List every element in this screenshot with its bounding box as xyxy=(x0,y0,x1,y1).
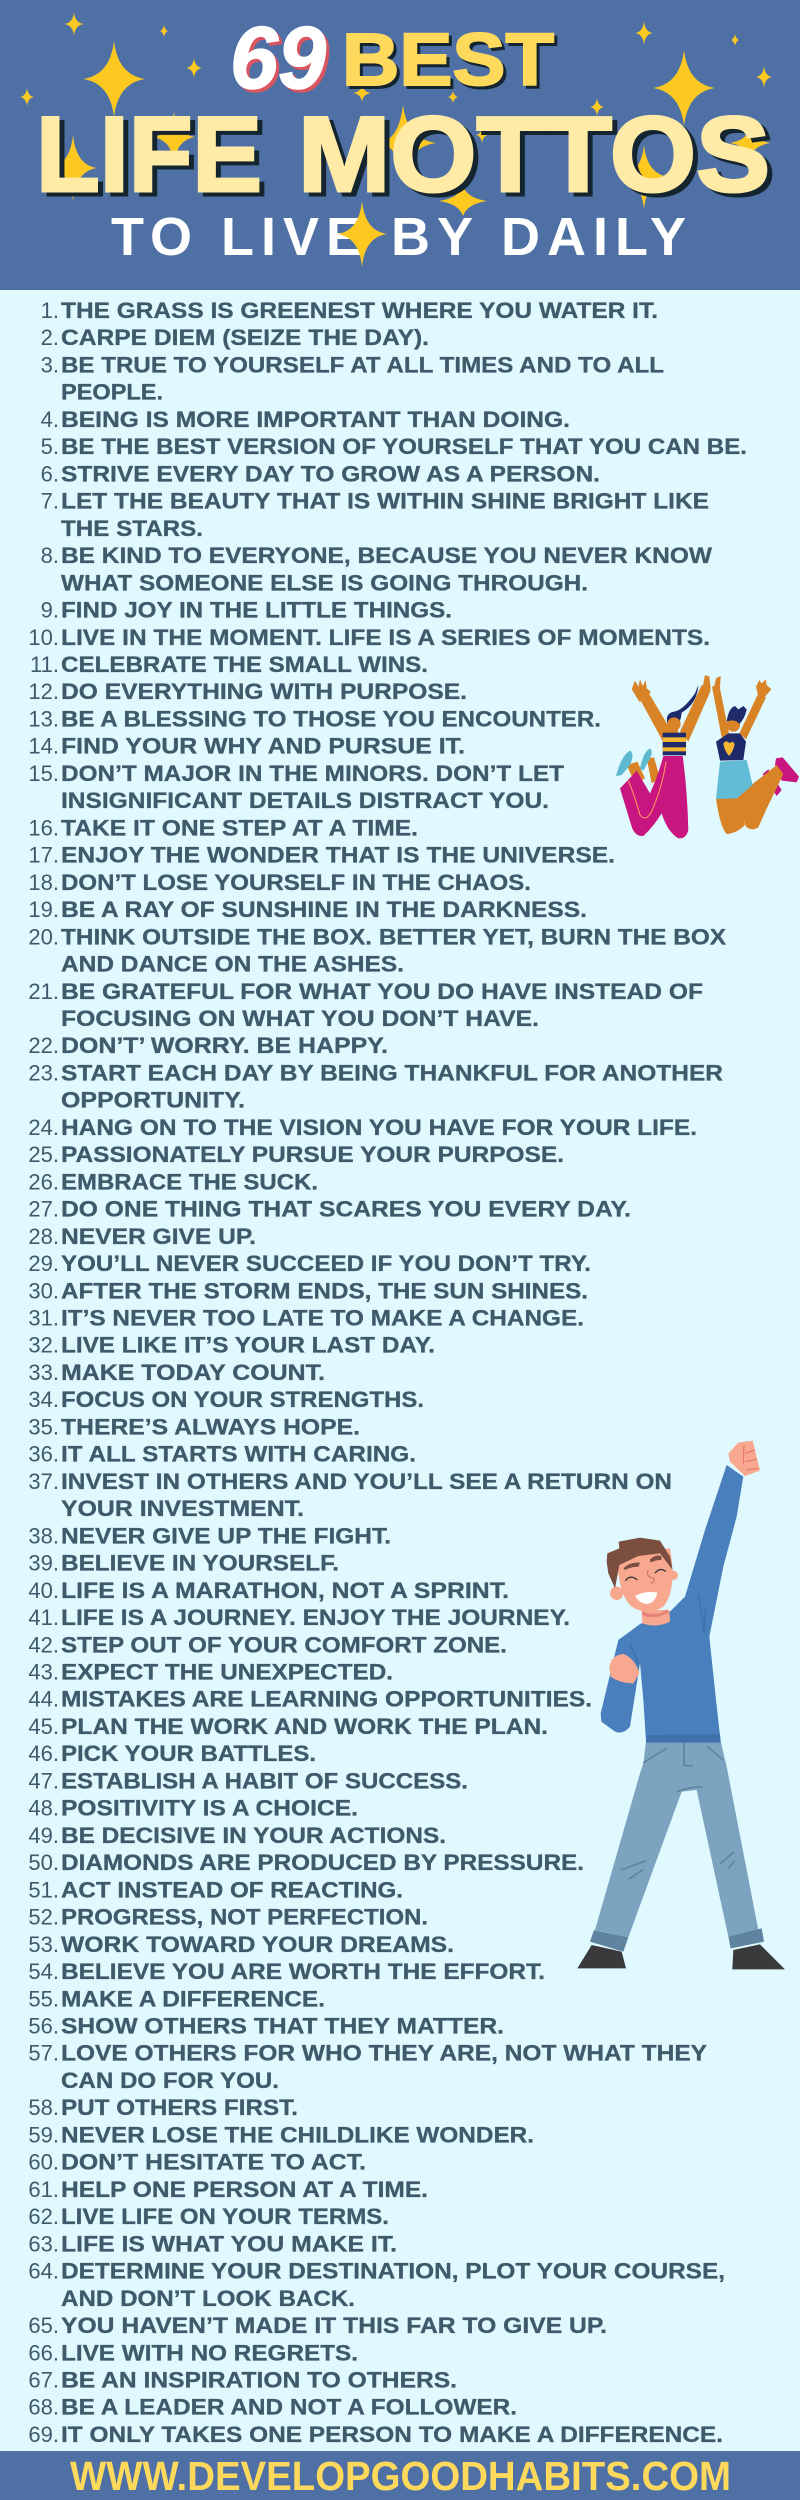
trouser creases xyxy=(621,1742,735,1879)
motto 49: 49. xyxy=(28,1823,59,1848)
motto 13: 13. xyxy=(28,706,59,732)
motto 46: PICK YOUR BATTLES. xyxy=(61,1741,316,1766)
motto 7: THE STARS. xyxy=(61,516,203,541)
motto 6: 6. xyxy=(41,461,59,486)
motto 69: IT ONLY TAKES ONE PERSON TO MAKE A DIFFERENCE. xyxy=(61,2422,723,2447)
motto 15: 15. xyxy=(28,761,59,786)
motto 35: THERE’S ALWAYS HOPE. xyxy=(61,1414,360,1439)
motto 20: THINK OUTSIDE THE BOX. BETTER YET, BURN THE BOX xyxy=(61,924,726,949)
motto 69: 69. xyxy=(28,2422,59,2447)
motto 64 xyxy=(28,2259,725,2311)
motto 67: 67. xyxy=(28,2368,59,2392)
motto 60: DON’T HESITATE TO ACT. xyxy=(61,2150,366,2175)
motto 23: START EACH DAY BY BEING THANKFUL FOR ANOTHER xyxy=(61,1060,723,1085)
motto 64: DETERMINE YOUR DESTINATION, PLOT YOUR COURSE, xyxy=(61,2259,725,2284)
motto 61: 61. xyxy=(28,2177,59,2202)
motto 31: IT’S NEVER TOO LATE TO MAKE A CHANGE. xyxy=(61,1306,584,1330)
motto 30: AFTER THE STORM ENDS, THE SUN SHINES. xyxy=(61,1278,588,1303)
motto 32: 32. xyxy=(28,1333,59,1358)
eyebrows xyxy=(623,1555,662,1570)
motto 5: BE THE BEST VERSION OF YOURSELF THAT YOU CAN BE. xyxy=(61,434,747,459)
motto 26: EMBRACE THE SUCK. xyxy=(61,1169,318,1194)
motto 21 xyxy=(28,979,703,1031)
smile xyxy=(635,1592,657,1604)
motto 4: 4. xyxy=(41,407,59,432)
motto 68: BE A LEADER AND NOT A FOLLOWER. xyxy=(61,2395,517,2420)
motto 58: 58. xyxy=(28,2095,59,2120)
motto 9: FIND JOY IN THE LITTLE THINGS. xyxy=(61,598,452,622)
icon: gold sparkle stars xyxy=(20,12,772,216)
motto 19: BE A RAY OF SUNSHINE IN THE DARKNESS. xyxy=(61,897,587,922)
motto 13: BE A BLESSING TO THOSE YOU ENCOUNTER. xyxy=(61,706,601,732)
motto 37: YOUR INVESTMENT. xyxy=(61,1496,304,1521)
motto 52: PROGRESS, NOT PERFECTION. xyxy=(61,1905,428,1930)
motto 37 xyxy=(28,1469,672,1521)
motto 50: 50. xyxy=(28,1850,59,1875)
motto 20: AND DANCE ON THE ASHES. xyxy=(61,952,404,976)
motto 44: 44. xyxy=(28,1687,59,1712)
heading: LIFE MOTTOS: LIFE xyxy=(36,94,262,214)
raised hand on left arm xyxy=(609,1654,639,1683)
motto 43: 43. xyxy=(28,1660,59,1684)
motto 57: LOVE OTHERS FOR WHO THEY ARE, NOT WHAT THEY xyxy=(61,2041,707,2066)
motto 28: NEVER GIVE UP. xyxy=(61,1224,256,1249)
motto 56: 56. xyxy=(28,2014,59,2038)
sweater hem xyxy=(646,1734,721,1743)
motto 3: 3. xyxy=(41,352,59,378)
motto 11: 11. xyxy=(30,652,59,677)
face xyxy=(617,1548,673,1612)
heading: BEST: BEST xyxy=(342,18,554,101)
motto 11: CELEBRATE THE SMALL WINS. xyxy=(61,652,428,677)
motto 35: 35. xyxy=(28,1414,59,1439)
motto 27: 27. xyxy=(28,1197,59,1222)
heading: 69: 69 xyxy=(230,8,326,107)
heading: BEST: BEST xyxy=(345,21,557,104)
motto 45: 45. xyxy=(28,1714,59,1739)
motto 34: FOCUS ON YOUR STRENGTHS. xyxy=(61,1387,424,1412)
motto 42: STEP OUT OF YOUR COMFORT ZONE. xyxy=(61,1632,507,1657)
motto 62: LIVE LIFE ON YOUR TERMS. xyxy=(61,2204,389,2229)
motto 15 xyxy=(28,761,564,813)
motto 29: YOU’LL NEVER SUCCEED IF YOU DON’T TRY. xyxy=(61,1251,591,1276)
motto 43: EXPECT THE UNEXPECTED. xyxy=(61,1660,393,1684)
motto 65: YOU HAVEN’T MADE IT THIS FAR TO GIVE UP. xyxy=(61,2313,607,2338)
motto 27: DO ONE THING THAT SCARES YOU EVERY DAY. xyxy=(61,1197,631,1222)
motto 57: 57. xyxy=(28,2041,59,2066)
motto 29: 29. xyxy=(28,1251,59,1276)
motto 25: PASSIONATELY PURSUE YOUR PURPOSE. xyxy=(61,1142,564,1167)
footer bar xyxy=(0,2451,800,2500)
neck shadow xyxy=(642,1609,669,1617)
motto 26: 26. xyxy=(28,1169,59,1194)
shoes xyxy=(577,1944,785,1969)
motto 30: 30. xyxy=(28,1278,59,1303)
motto 7: LET THE BEAUTY THAT IS WITHIN SHINE BRIGHT LIKE xyxy=(61,489,709,514)
motto 28: 28. xyxy=(28,1224,59,1249)
motto 45: PLAN THE WORK AND WORK THE PLAN. xyxy=(61,1714,548,1739)
motto 64: 64. xyxy=(28,2259,59,2284)
left woman xyxy=(616,675,711,838)
motto 32: LIVE LIKE IT’S YOUR LAST DAY. xyxy=(61,1333,435,1358)
motto 62: 62. xyxy=(28,2204,59,2229)
motto 8 xyxy=(41,543,713,595)
motto 39: BELIEVE IN YOURSELF. xyxy=(61,1551,339,1576)
motto 7 xyxy=(41,489,709,541)
motto 14: 14. xyxy=(28,734,59,759)
header banner xyxy=(0,0,800,290)
motto 67: BE AN INSPIRATION TO OTHERS. xyxy=(61,2368,457,2392)
motto 33: MAKE TODAY COUNT. xyxy=(61,1360,325,1385)
motto 16: 16. xyxy=(28,815,59,840)
motto 7: 7. xyxy=(41,489,59,514)
motto 58: PUT OTHERS FIRST. xyxy=(61,2095,298,2120)
neck xyxy=(642,1610,670,1625)
motto 3: BE TRUE TO YOURSELF AT ALL TIMES AND TO ALL xyxy=(61,352,664,378)
motto 36: 36. xyxy=(28,1442,59,1467)
motto 8: BE KIND TO EVERYONE, BECAUSE YOU NEVER KNOW xyxy=(61,543,713,568)
heading: LIFE MOTTOS: LIFE xyxy=(41,98,267,218)
illustration: two women jumping xyxy=(616,675,799,838)
motto 54: 54. xyxy=(28,1959,59,1984)
motto 51: 51. xyxy=(28,1877,59,1902)
motto 37: INVEST IN OTHERS AND YOU’LL SEE A RETURN ON xyxy=(61,1469,672,1494)
right woman xyxy=(712,676,799,834)
motto 46: 46. xyxy=(28,1741,59,1766)
motto 21: 21. xyxy=(28,979,59,1004)
motto 12: DO EVERYTHING WITH PURPOSE. xyxy=(61,679,467,704)
motto 68: 68. xyxy=(28,2395,59,2420)
motto 49: BE DECISIVE IN YOUR ACTIONS. xyxy=(61,1823,446,1848)
motto 53: 53. xyxy=(28,1932,59,1957)
heading: LIFE MOTTOS xyxy=(36,94,775,218)
motto 40: 40. xyxy=(28,1578,59,1603)
motto 6: STRIVE EVERY DAY TO GROW AS A PERSON. xyxy=(61,461,600,486)
motto 2: CARPE DIEM (SEIZE THE DAY). xyxy=(61,325,429,350)
motto 10: 10. xyxy=(28,625,59,650)
motto 55: 55. xyxy=(28,1986,59,2011)
motto 50: DIAMONDS ARE PRODUCED BY PRESSURE. xyxy=(61,1850,584,1875)
motto 64: AND DON’T LOOK BACK. xyxy=(61,2286,355,2311)
motto 5: 5. xyxy=(41,434,59,459)
motto 61: HELP ONE PERSON AT A TIME. xyxy=(61,2177,428,2202)
motto 51: ACT INSTEAD OF REACTING. xyxy=(61,1877,403,1902)
sweater xyxy=(601,1465,743,1742)
motto 54: BELIEVE YOU ARE WORTH THE EFFORT. xyxy=(61,1959,545,1984)
motto 55: MAKE A DIFFERENCE. xyxy=(61,1986,325,2011)
motto 63: 63. xyxy=(28,2231,59,2256)
motto 21: BE GRATEFUL FOR WHAT YOU DO HAVE INSTEAD OF xyxy=(61,979,703,1004)
motto 66: LIVE WITH NO REGRETS. xyxy=(61,2340,358,2365)
motto 19: 19. xyxy=(28,897,59,922)
motto 23: 23. xyxy=(28,1060,59,1085)
motto 16: TAKE IT ONE STEP AT A TIME. xyxy=(61,815,418,840)
eyes and nose xyxy=(625,1570,666,1583)
motto 18: DON’T LOSE YOURSELF IN THE CHAOS. xyxy=(61,870,531,895)
motto 66: 66. xyxy=(28,2340,59,2365)
heading: LIFE MOTTOS: MOTTOS xyxy=(298,94,770,214)
motto 31: 31. xyxy=(28,1306,59,1330)
motto 34: 34. xyxy=(28,1387,59,1412)
motto 3 xyxy=(41,352,664,405)
motto 42: 42. xyxy=(28,1632,59,1657)
motto 47: 47. xyxy=(28,1768,59,1793)
motto 23 xyxy=(28,1060,723,1113)
motto 48: 48. xyxy=(28,1796,59,1821)
motto 44: MISTAKES ARE LEARNING OPPORTUNITIES. xyxy=(61,1687,592,1712)
motto 60: 60. xyxy=(28,2150,59,2175)
motto 23: OPPORTUNITY. xyxy=(61,1088,245,1113)
motto 36: IT ALL STARTS WITH CARING. xyxy=(61,1442,416,1467)
motto 47: ESTABLISH A HABIT OF SUCCESS. xyxy=(61,1768,468,1793)
motto 21: FOCUSING ON WHAT YOU DON’T HAVE. xyxy=(61,1006,539,1031)
motto 38: NEVER GIVE UP THE FIGHT. xyxy=(61,1523,391,1548)
motto 10: LIVE IN THE MOMENT. LIFE IS A SERIES OF MOMENTS. xyxy=(61,625,710,650)
heading: TO LIVE BY DAILY: TO LIVE BY DAILY xyxy=(111,207,686,267)
motto 22: DON’T’ WORRY. BE HAPPY. xyxy=(61,1033,388,1058)
motto 57: CAN DO FOR YOU. xyxy=(61,2068,279,2093)
trousers xyxy=(595,1742,758,1937)
ears xyxy=(610,1587,623,1600)
icon: star over subtitle xyxy=(337,201,387,267)
motto 52: 52. xyxy=(28,1905,59,1930)
motto 4: BEING IS MORE IMPORTANT THAN DOING. xyxy=(61,407,570,432)
motto 39: 39. xyxy=(28,1551,59,1576)
motto 48: POSITIVITY IS A CHOICE. xyxy=(61,1796,358,1821)
motto list xyxy=(28,298,747,2447)
motto 3: PEOPLE. xyxy=(61,380,163,405)
motto 20: 20. xyxy=(28,924,59,949)
motto 17: 17. xyxy=(28,843,59,868)
motto 2: 2. xyxy=(41,325,59,350)
motto 63: LIFE IS WHAT YOU MAKE IT. xyxy=(61,2231,397,2256)
motto 53: WORK TOWARD YOUR DREAMS. xyxy=(61,1932,454,1957)
motto 40: LIFE IS A MARATHON, NOT A SPRINT. xyxy=(61,1578,509,1603)
motto 20 xyxy=(28,924,726,976)
motto 41: 41. xyxy=(28,1605,59,1630)
motto 15: INSIGNIFICANT DETAILS DISTRACT YOU. xyxy=(61,788,549,813)
motto 14: FIND YOUR WHY AND PURSUE IT. xyxy=(61,734,465,759)
motto 38: 38. xyxy=(28,1523,59,1548)
motto 41: LIFE IS A JOURNEY. ENJOY THE JOURNEY. xyxy=(61,1605,570,1630)
sweater folds xyxy=(631,1595,706,1663)
motto 24: HANG ON TO THE VISION YOU HAVE FOR YOUR LIFE. xyxy=(61,1115,697,1140)
illustration: cheering man xyxy=(577,1441,785,1969)
motto 8: 8. xyxy=(41,543,59,568)
motto 25: 25. xyxy=(28,1142,59,1167)
motto 8: WHAT SOMEONE ELSE IS GOING THROUGH. xyxy=(61,570,588,595)
trouser cuffs xyxy=(590,1928,764,1952)
motto 24: 24. xyxy=(28,1115,59,1140)
motto 57 xyxy=(28,2041,707,2093)
motto 1: 1. xyxy=(41,298,59,323)
motto 65: 65. xyxy=(28,2313,59,2338)
heading: LIFE MOTTOS: MOTTOS xyxy=(303,98,775,218)
motto 12: 12. xyxy=(28,679,59,704)
motto 22: 22. xyxy=(28,1033,59,1058)
motto 56: SHOW OTHERS THAT THEY MATTER. xyxy=(61,2014,504,2038)
motto 1: THE GRASS IS GREENEST WHERE YOU WATER IT. xyxy=(61,298,658,323)
motto 9: 9. xyxy=(41,598,59,622)
motto 17: ENJOY THE WONDER THAT IS THE UNIVERSE. xyxy=(61,843,615,868)
motto 33: 33. xyxy=(28,1360,59,1385)
motto 18: 18. xyxy=(28,870,59,895)
hair xyxy=(607,1538,673,1588)
heading: 69: 69 xyxy=(233,11,329,110)
motto 59: NEVER LOSE THE CHILDLIKE WONDER. xyxy=(61,2122,534,2147)
footer url: WWW.DEVELOPGOODHABITS.COM xyxy=(70,2453,731,2499)
motto 59: 59. xyxy=(28,2122,59,2147)
motto 37: 37. xyxy=(28,1469,59,1494)
fist xyxy=(728,1441,760,1476)
motto 15: DON’T MAJOR IN THE MINORS. DON’T LET xyxy=(61,761,564,786)
